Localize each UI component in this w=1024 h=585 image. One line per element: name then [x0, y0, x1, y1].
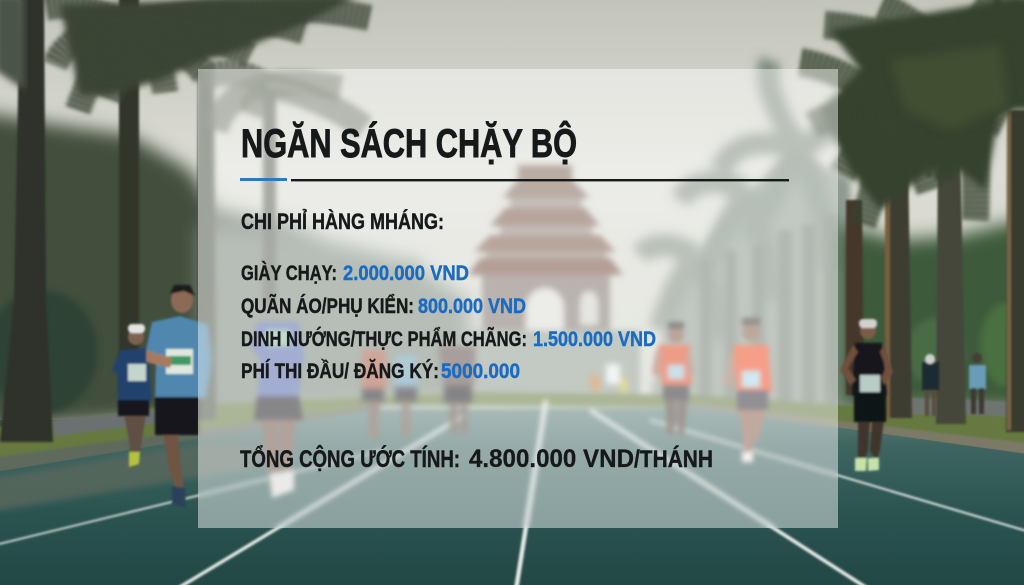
palm trunks — [0, 0, 1024, 442]
total estimate: /THÁNH — [634, 445, 713, 473]
expense: clothing: 800.000 VND — [418, 295, 526, 318]
palm canopies right — [800, 0, 1024, 225]
expense: shoes: GIÀY CHẠY: — [241, 262, 337, 285]
expense: race fees: 5000.000 — [441, 360, 520, 383]
translucent panel — [198, 69, 838, 528]
title rule: blue accent — [240, 178, 287, 181]
road surface — [0, 408, 1024, 585]
subheading: CHI PHỈ HÀNG MHÁNG: — [241, 209, 444, 234]
background trees right — [840, 215, 1024, 410]
expense: race fees: PHÍ THI ĐẦU/ ĐĂNG KÝ: — [241, 359, 439, 383]
runner: blue shirt foreground — [146, 285, 212, 508]
palm canopies left — [45, 6, 370, 130]
expense: nutrition: DINH NƯỚNG/THỰC PHẨM CHÃNG: — [241, 327, 527, 351]
title: NGĂN SÁCH CHẶY BỘ — [241, 120, 577, 166]
total estimate — [240, 445, 713, 473]
expense: clothing: QUÃN ÁO/PHỤ KIỂN: — [241, 295, 414, 318]
road light patch — [0, 442, 300, 512]
palm canopy mass left — [60, 0, 360, 95]
expense: shoes: 2.000.000 VND — [343, 262, 469, 285]
runner: woman in periwinkle shirt — [250, 322, 304, 498]
lane lines — [0, 400, 1024, 585]
ground: grass and kerbs — [0, 392, 1024, 474]
total estimate: 4.800.000 VND — [469, 445, 634, 473]
runner: navy shirt with white cap — [112, 324, 152, 467]
expense: shoes — [241, 262, 469, 285]
palm canopy mass right — [820, 0, 1024, 210]
background trees left — [0, 110, 470, 430]
total estimate: TỔNG CỘNG ƯỚC TÍNH: — [240, 445, 460, 473]
sky — [0, 0, 1024, 420]
misty palm row right of centre — [640, 60, 880, 340]
runner: black vest — [840, 319, 893, 471]
title rule: black line — [291, 179, 789, 181]
distant runners on the right path — [922, 353, 986, 416]
pagoda — [465, 165, 640, 400]
runner: orange shirt small — [652, 322, 694, 438]
expense: nutrition: 1.500.000 VND — [533, 328, 656, 351]
runner: orange vest — [724, 318, 772, 462]
background runners in the panel — [362, 346, 628, 438]
